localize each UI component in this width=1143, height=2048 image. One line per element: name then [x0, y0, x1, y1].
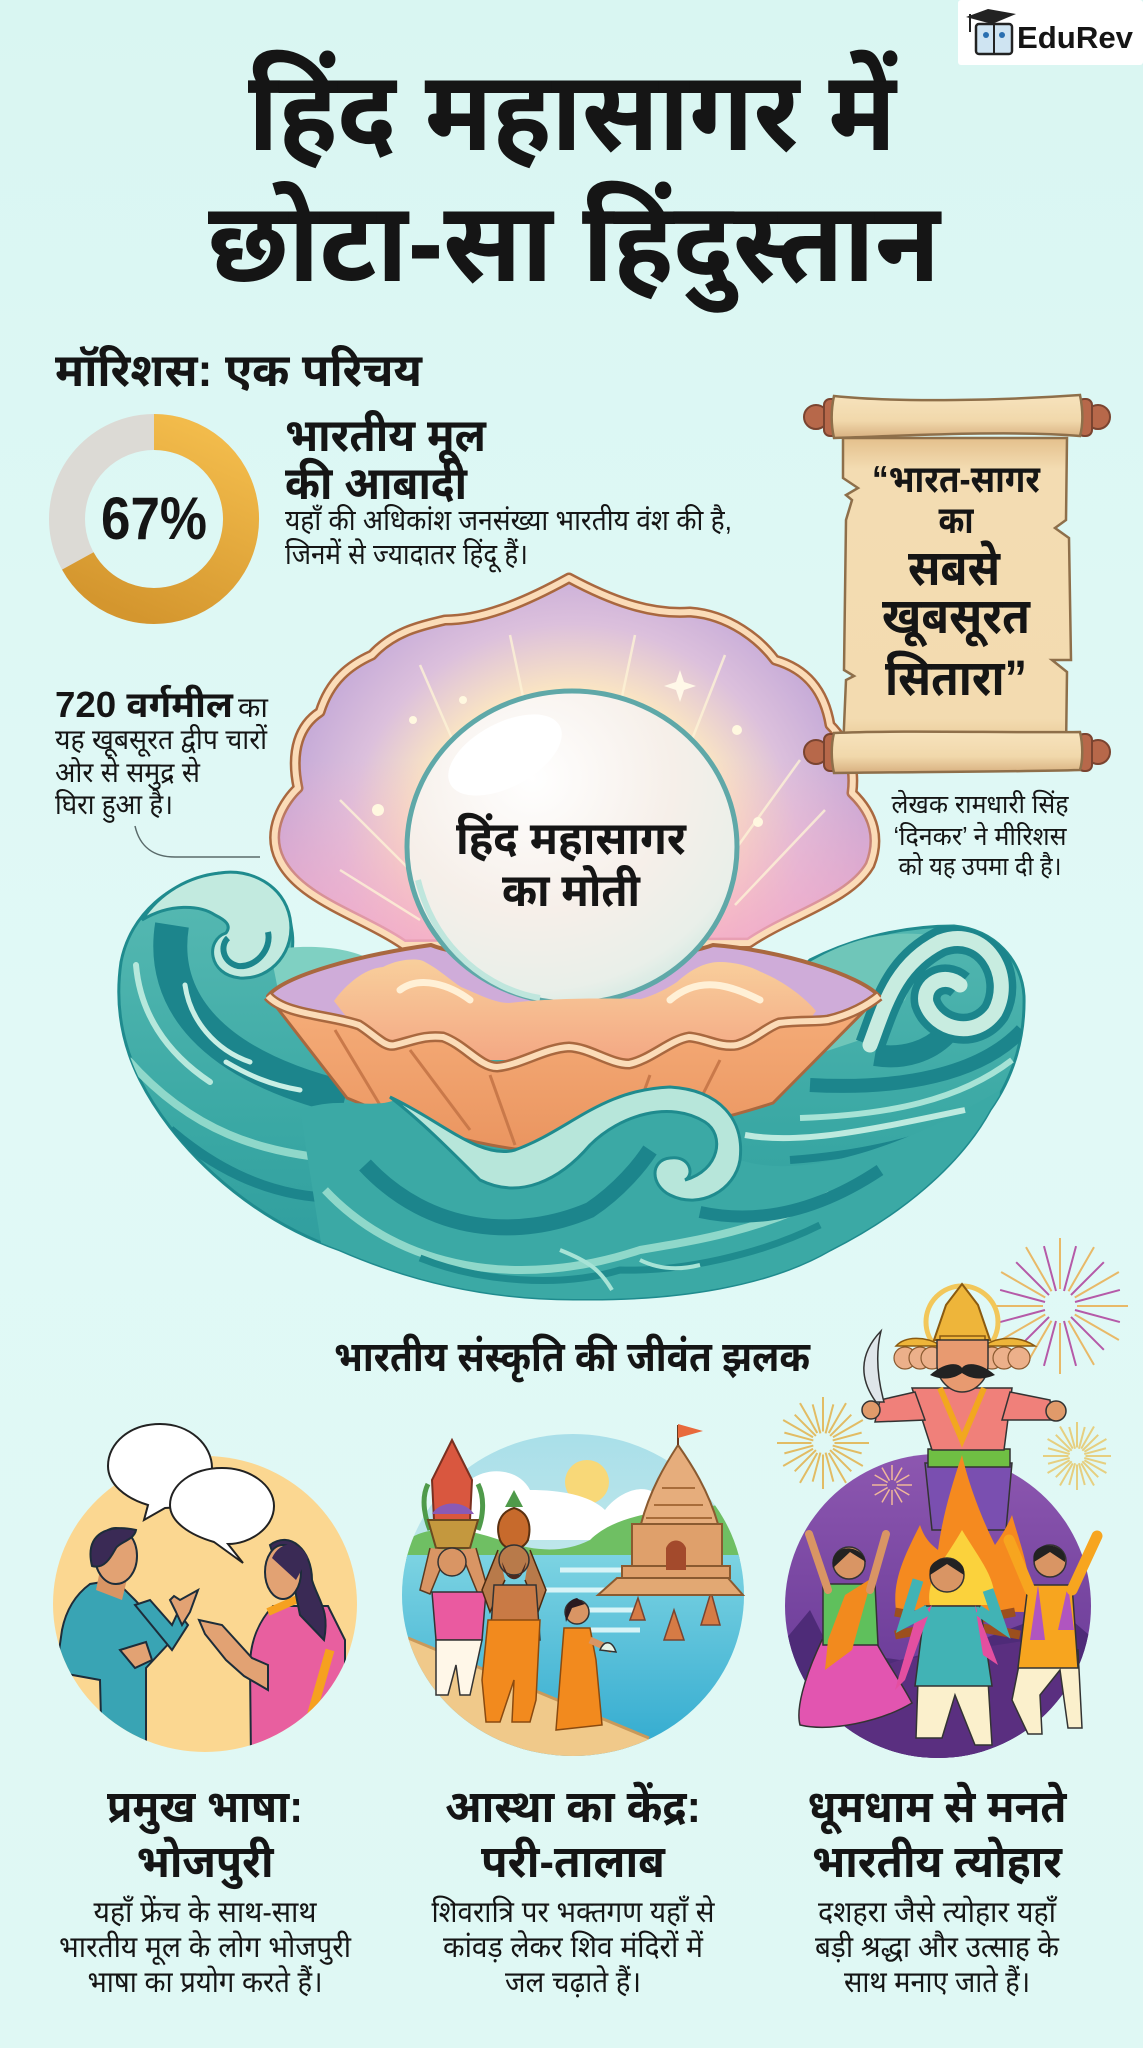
- text: author note: को यह उपमा दी है।: [898, 851, 1062, 881]
- scroll quote text: सितारा”: [885, 650, 1027, 706]
- column: faith: शिवरात्रि पर भक्तगण यहाँ से: [432, 1894, 715, 1929]
- text: pearl of the Indian Ocean: हिंद महासागर: [456, 812, 687, 864]
- text: pearl of the Indian Ocean: का मोती: [502, 864, 641, 916]
- stat text: Indian origin population: भारतीय मूल: [285, 409, 487, 465]
- stat text: Indian origin population: [285, 409, 732, 573]
- woman with offering: [556, 1598, 616, 1730]
- text: pearl of the Indian Ocean: [456, 812, 687, 916]
- dancer: middle man: [895, 1558, 1000, 1745]
- illustration: upper shell: [275, 578, 875, 945]
- illustration: lower shell front: [268, 959, 879, 1149]
- donut chart: 67 percent: [67, 432, 241, 606]
- dancer: right man: [1009, 1536, 1097, 1734]
- section heading: culture: भारतीय संस्कृति की जीवंत झलक: [334, 1333, 811, 1383]
- scroll top roller: [804, 395, 1110, 438]
- illustration: pearl: [407, 691, 737, 1003]
- temple: [598, 1424, 743, 1595]
- pilgrim with kanwar: [420, 1440, 488, 1695]
- callout: area of island: का: [238, 692, 269, 723]
- title: [208, 49, 942, 313]
- illustration: festival circle: [774, 1230, 1136, 1760]
- column: language: भोजपुरी: [136, 1836, 274, 1889]
- column: festivals: [808, 1781, 1068, 1999]
- text: author note: लेखक रामधारी सिंह: [892, 789, 1070, 819]
- stat text: Indian origin population: यहाँ की अधिकांश जनसंख्या भारतीय वंश की है,: [285, 504, 732, 537]
- scroll quote text: सबसे: [908, 540, 1001, 596]
- column: language: भाषा का प्रयोग करते हैं।: [88, 1964, 322, 1999]
- illustration: front waves: [300, 1087, 1000, 1300]
- scroll quote text: [872, 459, 1041, 706]
- firework burst top right: [984, 1230, 1136, 1382]
- firework burst left: [774, 1394, 872, 1492]
- Ravan effigy: [862, 1284, 1066, 1530]
- text: author note: ‘दिनकर’ ने मीरिशस: [894, 821, 1067, 851]
- scroll: [804, 395, 1110, 773]
- bonfire: [895, 1455, 1030, 1635]
- firework burst right: [1040, 1419, 1114, 1493]
- column: language: भारतीय मूल के लोग भोजपुरी: [59, 1929, 352, 1966]
- column: faith: परी-तालाब: [481, 1836, 666, 1887]
- column: language: प्रमुख भाषा:: [107, 1781, 303, 1834]
- pilgrim with pot: [482, 1490, 546, 1722]
- logo: EduRev: EduRev: [1017, 20, 1134, 55]
- illustration: waves behind shell: [119, 872, 1024, 1299]
- scroll quote text: खूबसूरत: [882, 588, 1031, 648]
- callout: area of island: यह खूबसूरत द्वीप चारों: [55, 723, 268, 757]
- callout: area of island: ओर से समुद्र से: [55, 756, 201, 790]
- callout: area of island: [55, 684, 269, 857]
- column: festivals: बड़ी श्रद्धा और उत्साह के: [815, 1929, 1060, 1964]
- column: faith: जल चढ़ाते हैं।: [505, 1964, 641, 1999]
- left crest: [142, 872, 291, 978]
- stat text: Indian origin population: की आबादी: [285, 457, 468, 509]
- title: छोटा-सा हिंदुस्तान: [208, 180, 942, 313]
- scroll quote text: का: [938, 500, 974, 542]
- text: author note: [892, 789, 1070, 881]
- scroll quote text: “भारत-सागर: [872, 459, 1041, 501]
- donut chart: 67 percent: 67%: [101, 485, 207, 552]
- column: festivals: धूमधाम से मनते: [808, 1781, 1068, 1835]
- logo: EduRev: [958, 0, 1143, 65]
- callout: area of island: घिरा हुआ है।: [55, 788, 173, 823]
- speech bubbles: [108, 1424, 274, 1563]
- column: festivals: दशहरा जैसे त्योहार यहाँ: [818, 1894, 1058, 1929]
- column: festivals: साथ मनाए जाते हैं।: [844, 1964, 1030, 1999]
- column: faith: [432, 1781, 715, 1999]
- illustration: temple and pilgrims circle: [395, 1424, 750, 1760]
- dancer: woman: [799, 1534, 912, 1727]
- illustration: lower shell back: [268, 945, 879, 1020]
- scroll bottom roller: [804, 732, 1110, 773]
- column: faith: आस्था का केंद्र:: [445, 1781, 701, 1832]
- illustration: conversation circle: [53, 1424, 357, 1760]
- column: festivals: भारतीय त्योहार: [812, 1836, 1063, 1887]
- heading: Mauritius introduction: मॉरिशस: एक परिचय: [55, 344, 423, 396]
- column: language: [59, 1781, 352, 1999]
- callout: area of island: 720 वर्गमील: [55, 684, 234, 725]
- column: faith: कांवड़ लेकर शिव मंदिरों में: [443, 1929, 704, 1964]
- title: हिंद महासागर में: [248, 49, 898, 174]
- stat text: Indian origin population: जिनमें से ज्यादातर हिंदू हैं।: [285, 538, 528, 573]
- column: language: यहाँ फ्रेंच के साथ-साथ: [94, 1894, 317, 1929]
- firework burst small: [872, 1465, 912, 1505]
